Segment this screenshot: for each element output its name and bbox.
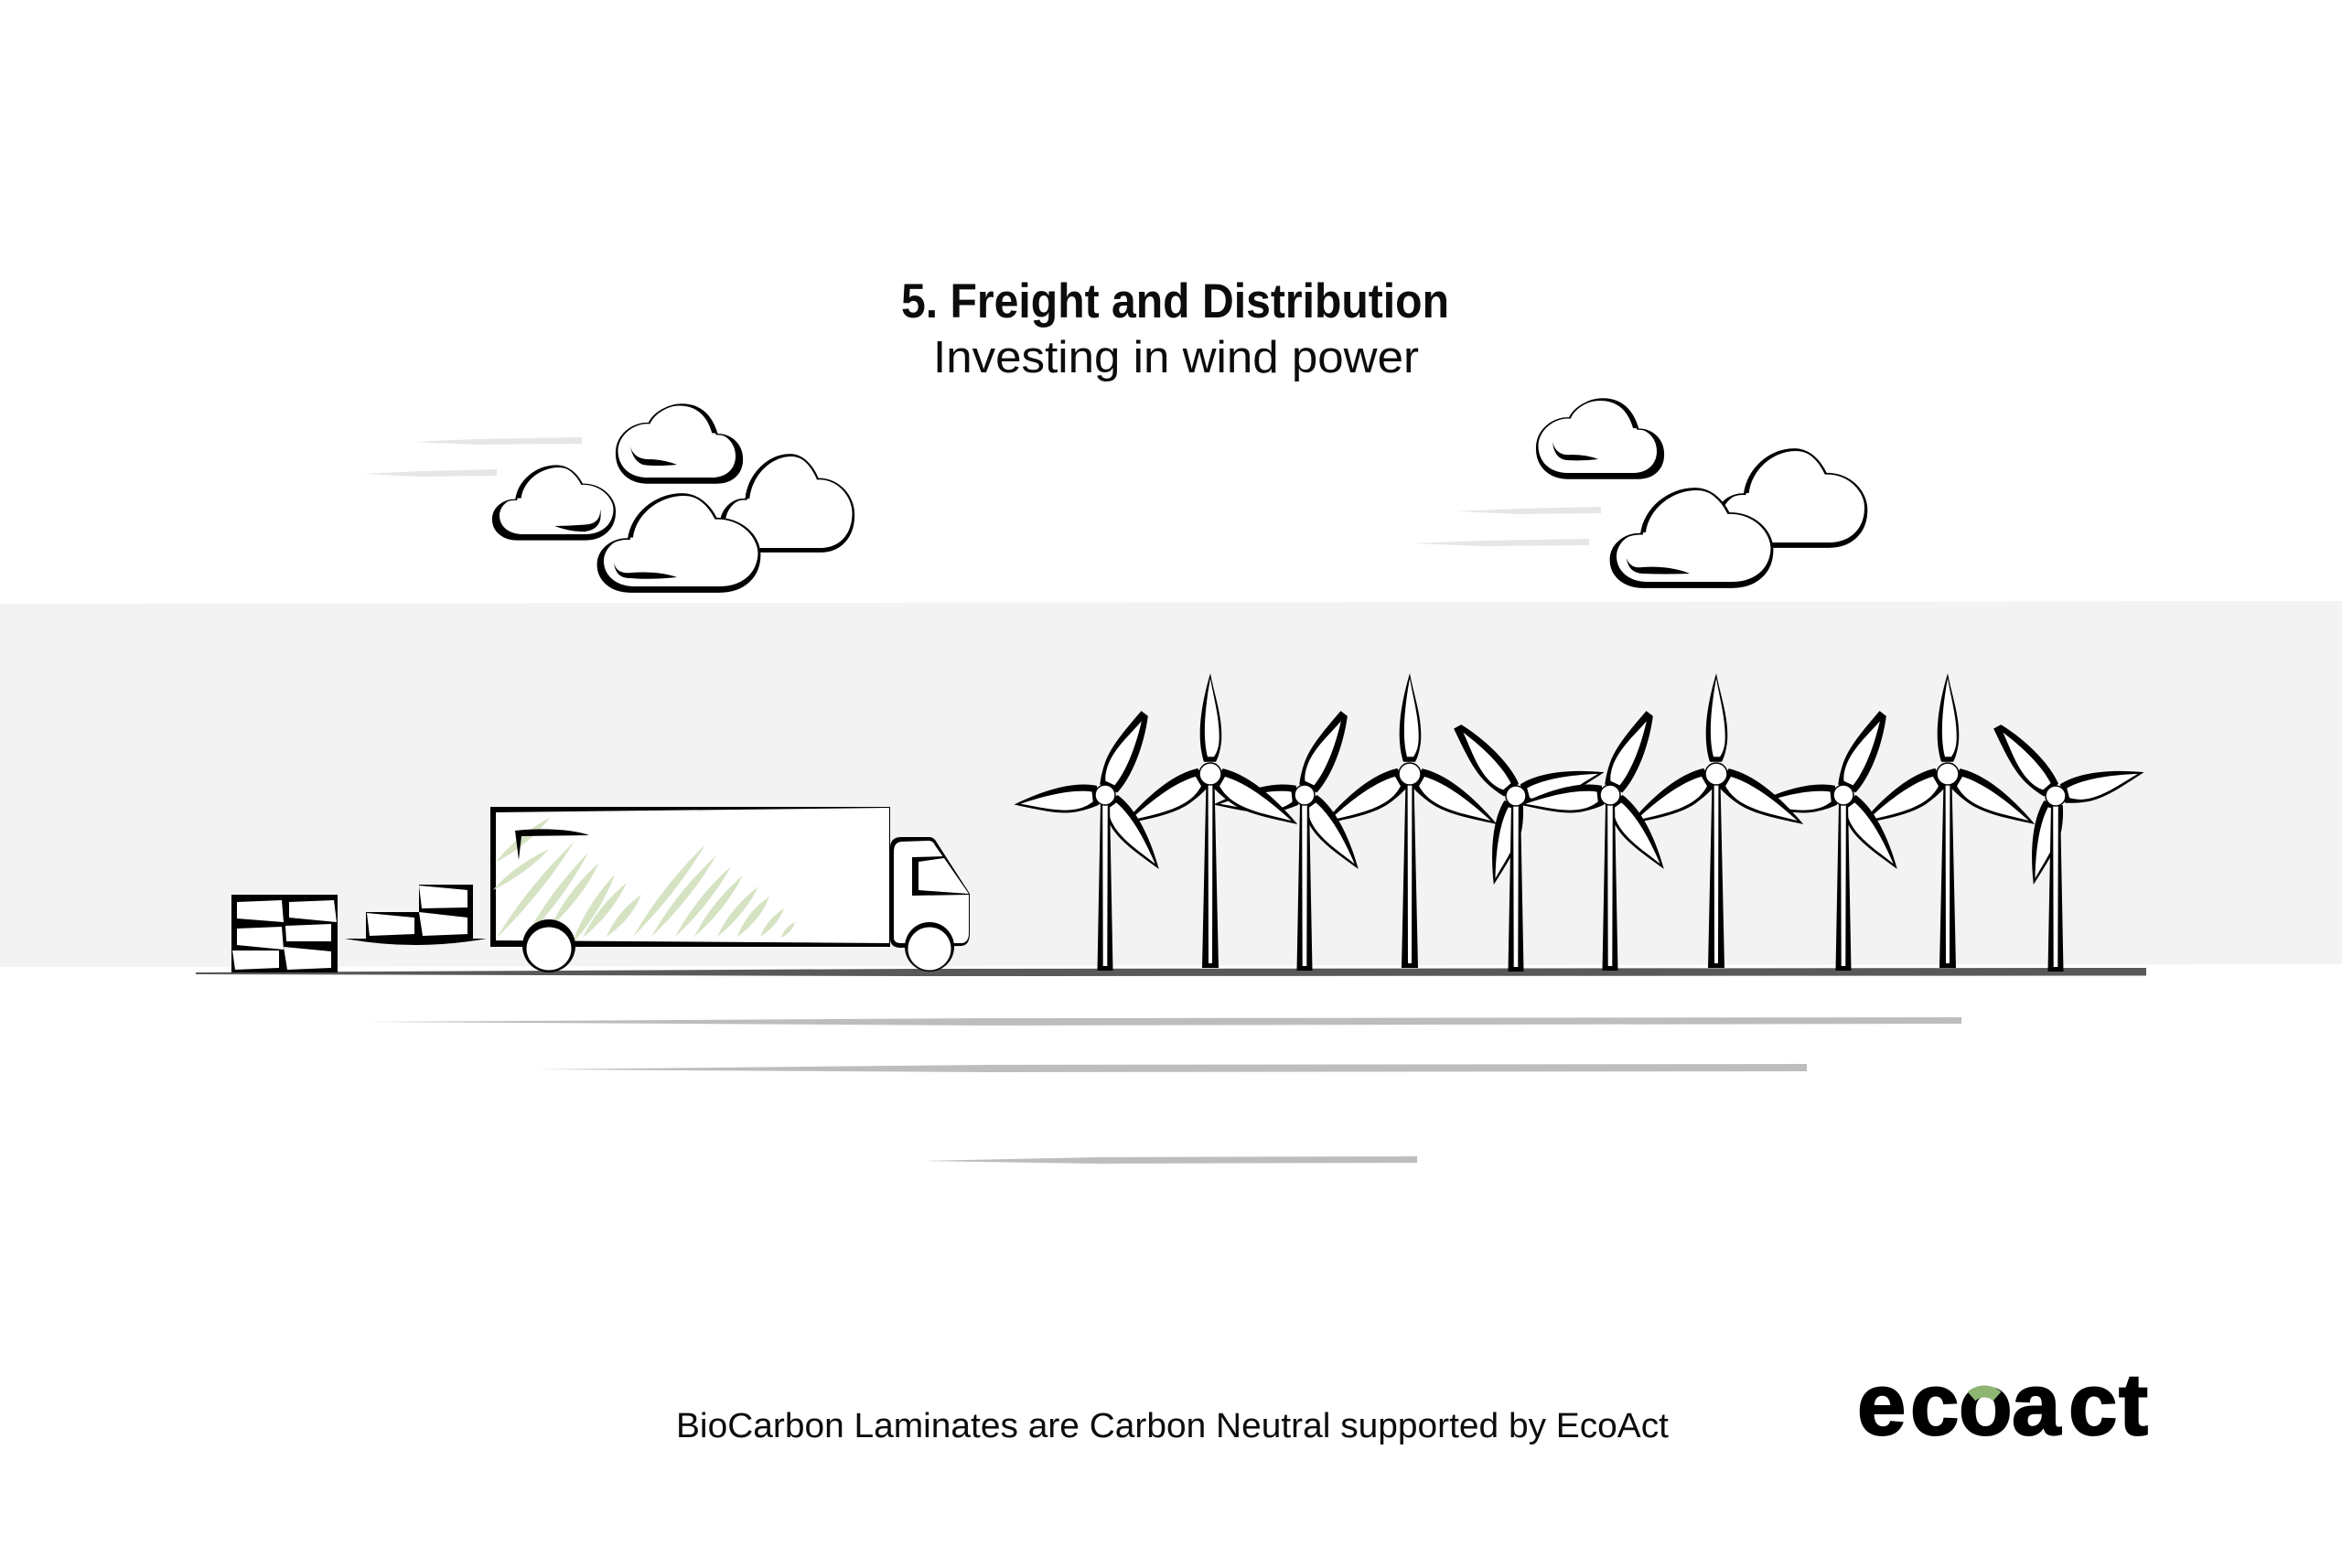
turbine 4 bbox=[1316, 673, 1504, 968]
cloud: back right bbox=[1716, 449, 1866, 547]
speed lines: right clouds bbox=[1413, 507, 1601, 546]
corner mark bbox=[515, 829, 589, 860]
turbine 3 bbox=[1212, 706, 1369, 971]
cab bbox=[890, 837, 970, 948]
speed lines: below ground bbox=[366, 1017, 1961, 1164]
title: 5. Freight and Distribution bbox=[901, 274, 1449, 328]
cloud: top bbox=[1537, 399, 1663, 478]
rear wheel bbox=[522, 919, 575, 972]
clouds: left cluster bbox=[493, 404, 854, 592]
cloud: front large bbox=[598, 494, 759, 592]
speed lines: left clouds bbox=[362, 437, 582, 477]
turbine 9 bbox=[1853, 673, 2042, 968]
turbine 7 bbox=[1622, 673, 1810, 968]
turbine 10 bbox=[1985, 718, 2148, 972]
logo: ecoact: ecoact bbox=[1857, 1356, 2148, 1454]
ground line bbox=[196, 968, 2146, 976]
truck bbox=[490, 807, 970, 972]
green hatching bbox=[493, 817, 795, 944]
clouds: right cluster bbox=[1537, 399, 1866, 587]
boxes on pallet bbox=[345, 885, 487, 945]
stacked boxes bbox=[231, 895, 338, 972]
background band bbox=[0, 601, 2342, 967]
logo accent bbox=[1971, 1391, 1997, 1396]
turbine 2 bbox=[1116, 673, 1305, 968]
turbine 5 bbox=[1445, 718, 1608, 972]
wind turbines bbox=[1013, 673, 2148, 972]
cloud: front large bbox=[1611, 489, 1772, 587]
footer text: BioCarbon Laminates are Carbon Neutral supported by EcoAct bbox=[676, 1407, 1669, 1445]
cloud: back right bbox=[721, 455, 854, 552]
turbine 6 bbox=[1518, 706, 1674, 971]
turbine 1 bbox=[1013, 706, 1169, 971]
front wheel bbox=[905, 922, 954, 972]
cloud: top bbox=[617, 404, 742, 483]
turbine 8 bbox=[1751, 706, 1907, 971]
subtitle: Investing in wind power bbox=[933, 333, 1419, 382]
cloud: small left bbox=[493, 466, 615, 540]
cargo box bbox=[490, 807, 890, 947]
